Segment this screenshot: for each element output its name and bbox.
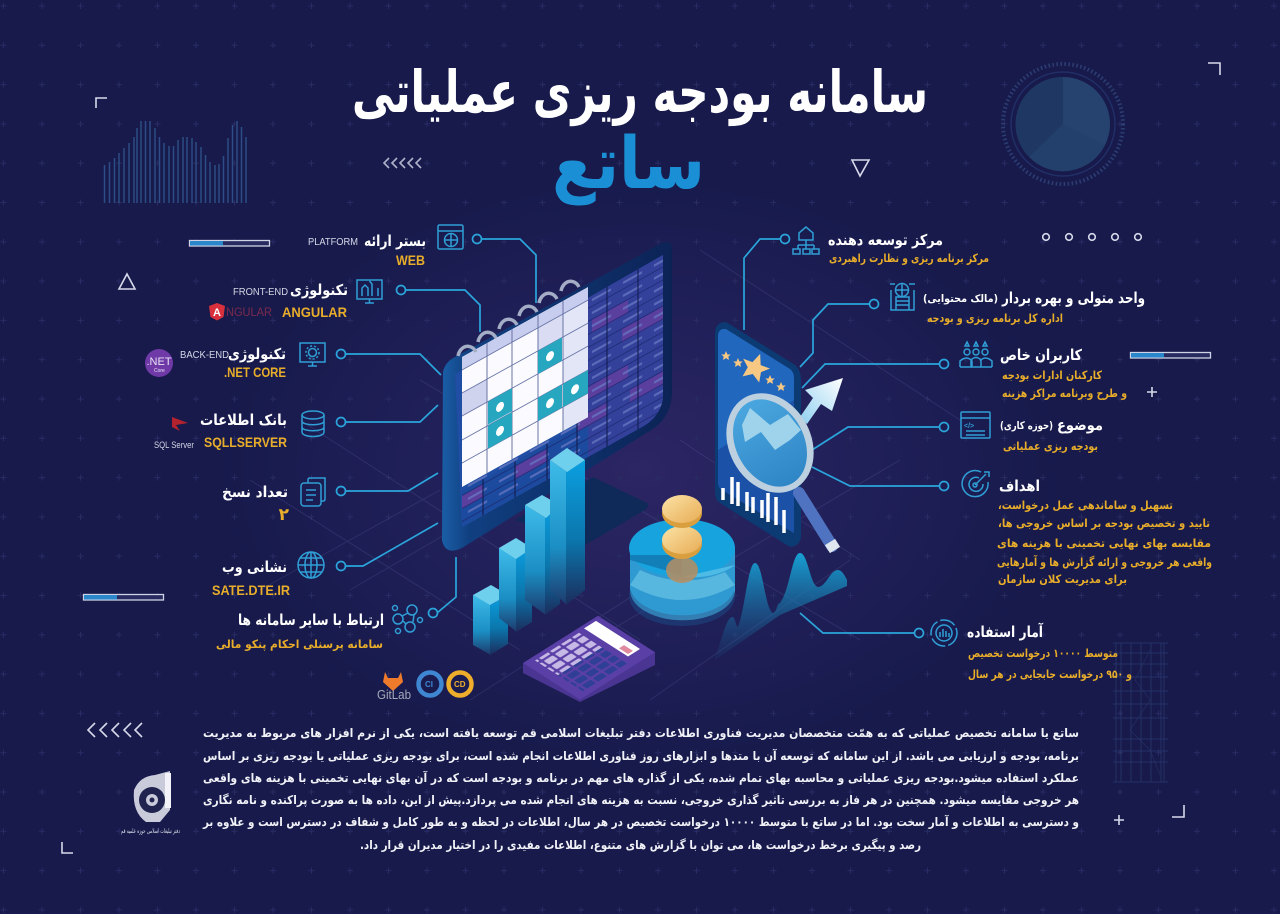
item: front-end technology: تکنولوژی bbox=[290, 281, 348, 299]
icon: warehouse globe bbox=[890, 284, 915, 310]
magnifying glass bbox=[709, 378, 835, 550]
icon: database bbox=[302, 411, 324, 436]
icon: .NET logo: .NET bbox=[146, 356, 172, 368]
item: developer center: مرکز برنامه ریزی و نظارت راهبردی bbox=[829, 251, 989, 266]
item: special users: و طرح وبرنامه مراکز هزینه bbox=[1002, 386, 1127, 401]
item: subject bbox=[961, 412, 1103, 454]
item: integrations: ارتباط با سایر سامانه ها bbox=[238, 611, 384, 629]
calendar bbox=[458, 281, 588, 487]
item: web address bbox=[212, 552, 324, 598]
icon: angular logo: A bbox=[213, 307, 221, 319]
icon: front-end screen bbox=[357, 280, 382, 303]
item: subject: موضوع bbox=[1057, 416, 1103, 434]
title: سامانه بودجه ریزی عملیاتی bbox=[352, 58, 928, 127]
logo: CI/CD loop bbox=[418, 672, 472, 696]
logo: organisation emblem: دفتر تبلیغات اسلامی حوزه علمیه قم bbox=[121, 827, 180, 835]
icon: back-end gear screen bbox=[300, 343, 325, 366]
item: web address: نشانی وب bbox=[222, 558, 287, 576]
area wave chart bbox=[715, 553, 847, 660]
logo: GitLab bbox=[377, 672, 411, 702]
phone bars bbox=[723, 477, 784, 533]
description paragraph bbox=[202, 726, 1079, 853]
icon: browser globe bbox=[438, 225, 463, 249]
monitor stand bbox=[515, 477, 648, 545]
item: subject: بودجه ریزی عملیاتی bbox=[1003, 439, 1098, 454]
icon: SQL Server logo: SQL Server bbox=[154, 440, 194, 451]
icon: globe bbox=[298, 552, 324, 578]
item: platform bbox=[308, 225, 463, 268]
goals text bbox=[997, 498, 1212, 586]
description paragraph: برنامه، بودجه و ارزیابی می باشد. از این سامانه که توسعه آن با متدها و ابزارهای روز فناوری اطلاعات انجام شده است، برای بودجه ریزی عملیاتی یا بودجه ریزی بر اساس bbox=[203, 748, 1079, 764]
icon: angular logo: NGULAR bbox=[226, 307, 272, 319]
icon: users and stars bbox=[960, 342, 992, 367]
item: owner unit: اداره کل برنامه ریزی و بودجه bbox=[927, 311, 1063, 326]
item: front-end technology: ANGULAR bbox=[282, 304, 347, 320]
decorative pie dial bbox=[1003, 64, 1123, 184]
icon: network bbox=[392, 605, 422, 634]
icon: stats dial bbox=[931, 620, 957, 646]
stars bbox=[721, 349, 786, 391]
item: database bbox=[154, 411, 324, 451]
icon: .NET logo bbox=[145, 349, 173, 377]
icon: documents bbox=[301, 478, 325, 506]
logo: GitLab: GitLab bbox=[377, 688, 411, 702]
3D bar chart bbox=[473, 448, 585, 655]
description paragraph: ساتع یا سامانه تخصیص عملیاتی که به همّت متخصصان مدیریت فناوری اطلاعات دفتر تبلیغات اسلامی قم توسعه یافته است، یکی از نرم افزار های مربوط به مدیریت bbox=[203, 726, 1079, 741]
goals text: تایید و تخصیص بودجه بر اساس خروجی ها، bbox=[998, 516, 1210, 531]
item: back-end technology: تکنولوژی bbox=[228, 345, 286, 363]
icon: angular logo bbox=[209, 303, 272, 320]
item: usage stats: و ۹۵۰ درخواست جابجایی در هر سال bbox=[968, 667, 1132, 682]
item: web address: SATE.DTE.IR bbox=[212, 582, 290, 598]
monitor frame bbox=[442, 242, 672, 551]
decorative dots row bbox=[1043, 234, 1141, 240]
item: owner unit bbox=[890, 284, 1145, 326]
item: number of versions bbox=[222, 478, 325, 525]
description paragraph: هر خروجی مقایسه میشود. همچنین در هر فاز به بررسی تاثیر گذاری خروجی، نسبت به هزینه های انجام شده می پردازد.پیش از این، داده ها به صورت پراکنده و نامه نگاری bbox=[203, 793, 1079, 808]
icon: .NET logo: Core bbox=[154, 368, 165, 374]
monitor illustration bbox=[442, 234, 682, 551]
item: back-end technology bbox=[145, 343, 325, 380]
item: front-end technology: FRONT-END bbox=[233, 286, 288, 298]
goals text: مقایسه بهای نهایی تخمینی با هزینه های bbox=[997, 536, 1211, 550]
calendar rings bbox=[458, 281, 579, 356]
decorative bar chart bbox=[104, 121, 246, 203]
circuit lines bbox=[336, 234, 948, 638]
item: usage stats: آمار استفاده bbox=[967, 623, 1044, 641]
icon: code window: </> bbox=[964, 423, 974, 430]
item: platform: PLATFORM bbox=[308, 236, 358, 248]
decorative grid chart bbox=[1113, 643, 1168, 782]
item: database: بانک اطلاعات bbox=[200, 411, 287, 429]
item: goals bbox=[962, 471, 1212, 586]
decorative chevrons bbox=[88, 158, 421, 737]
monitor screen table bbox=[455, 255, 663, 527]
item: usage stats bbox=[931, 620, 1132, 682]
item: owner unit: (مالک محتوایی) bbox=[923, 293, 998, 305]
coins bbox=[666, 557, 698, 583]
logo: CI/CD loop: CD bbox=[454, 680, 466, 689]
goals text: تسهیل و ساماندهی عمل درخواست، bbox=[998, 498, 1173, 513]
icon: code window bbox=[961, 412, 990, 438]
decorative progress bars bbox=[84, 240, 1210, 600]
calculator bbox=[523, 616, 655, 702]
arrow bbox=[800, 378, 843, 424]
icon: organisation chart bbox=[793, 227, 819, 254]
item: owner unit: واحد متولی و بهره بردار bbox=[1001, 289, 1145, 307]
item: platform: WEB bbox=[396, 252, 425, 268]
item: integrations: سامانه پرسنلی احکام پنکو مالی bbox=[216, 637, 383, 652]
smartphone bbox=[715, 322, 801, 547]
item: integrations bbox=[216, 605, 422, 652]
description paragraph: و دسترسی به اطلاعات و آمار سخت بود. اما در ساتع با متوسط ۱۰۰۰۰ درخواست تخصیص در هر سال، اطلاعات در لحظه و به طور کامل و شفاف در دسترس است و علاوه بر bbox=[202, 814, 1079, 830]
pie cylinder with coins bbox=[629, 495, 735, 626]
goals text: برای مدیریت کلان سازمان bbox=[998, 572, 1127, 586]
item: special users: کارکنان ادارات بودجه bbox=[1002, 368, 1102, 383]
decorative corner marks and shapes bbox=[62, 63, 1220, 853]
item: number of versions: تعداد نسخ bbox=[222, 483, 288, 501]
item: number of versions: ۲ bbox=[279, 505, 290, 525]
item: developer center bbox=[793, 227, 989, 266]
description paragraph: رصد و پیگیری برخط درخواست ها، می توان با گزارش های متنوع، اطلاعات مفیدی را در اختیار مدیران قرار داد. bbox=[360, 838, 921, 853]
logo: CI/CD loop: CI bbox=[425, 680, 433, 689]
item: front-end technology bbox=[209, 280, 382, 320]
item: database: SQLLSERVER bbox=[204, 434, 287, 450]
item: goals: اهداف bbox=[999, 477, 1040, 495]
item: back-end technology: .NET CORE bbox=[224, 364, 286, 380]
icon: target bbox=[962, 471, 989, 497]
item: back-end technology: BACK-END bbox=[180, 349, 229, 361]
subtitle: system name: ساتع bbox=[552, 121, 705, 206]
item: subject: (حوزه کاری) bbox=[1000, 420, 1053, 432]
goals text: واقعی هر خروجی و ارائه گزارش ها و آمارهایی bbox=[997, 555, 1212, 570]
item: usage stats: متوسط ۱۰۰۰۰ درخواست تخصیص bbox=[968, 646, 1118, 661]
item: special users: کاربران خاص bbox=[1000, 346, 1082, 364]
icon: SQL Server logo bbox=[154, 417, 194, 451]
description paragraph: عملکرد استفاده میشود.بودجه ریزی عملیاتی و محاسبه بهای تمام شده، یکی از گذاره های مهم در برنامه و بودجه است که در آن بهای نهایی تخمینی با هزینه های واقعی bbox=[203, 770, 1079, 786]
logo: organisation emblem bbox=[121, 771, 180, 835]
item: developer center: مرکز توسعه دهنده bbox=[828, 231, 943, 249]
item: special users bbox=[960, 342, 1127, 401]
item: platform: بستر ارائه bbox=[364, 232, 426, 250]
